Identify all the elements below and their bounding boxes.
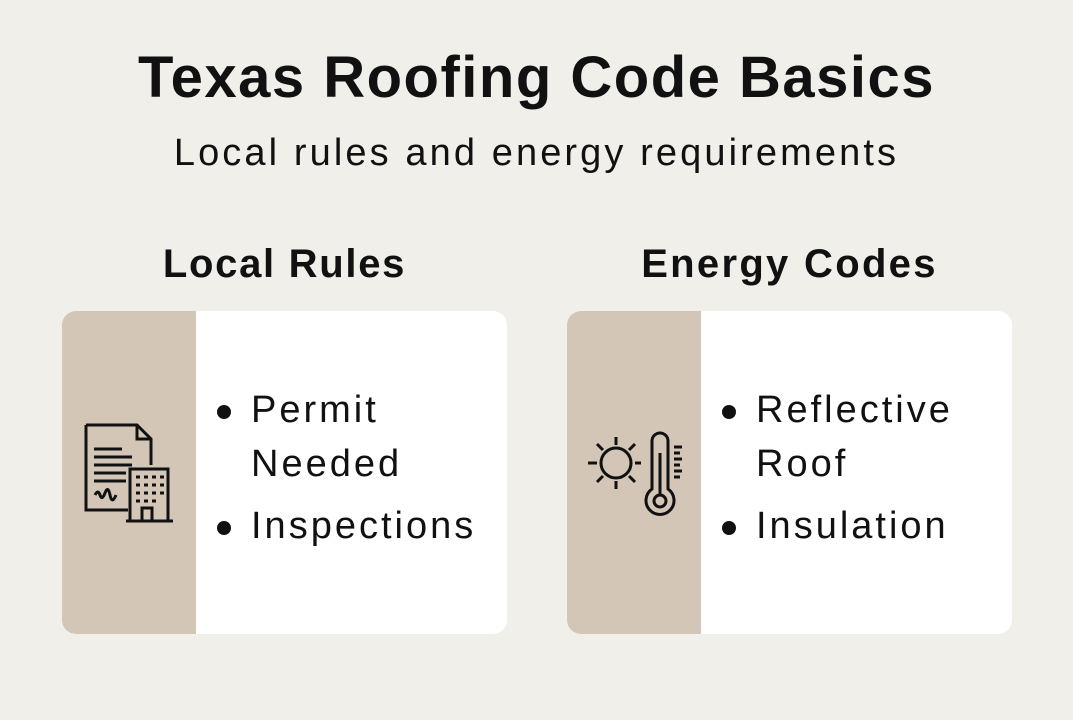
icon: sun and thermometer <box>588 432 682 516</box>
title: Texas Roofing Code Basics <box>138 45 935 110</box>
text: bullets: Needed <box>251 443 402 485</box>
text: bullets: Inspections <box>251 505 476 547</box>
text: bullets: Reflective <box>756 389 953 431</box>
text: bullets: Roof <box>756 443 848 485</box>
heading: energy codes: Energy Codes <box>641 242 938 286</box>
panel: energy codes <box>567 311 1012 634</box>
heading: local rules: Local Rules <box>163 242 406 286</box>
text: bullets: Permit <box>251 389 379 431</box>
text: bullets <box>722 389 953 547</box>
text: bullets <box>217 389 476 547</box>
icon: document and building <box>84 424 173 522</box>
subtitle: Local rules and energy requirements <box>174 132 899 174</box>
panel: local rules <box>62 311 507 634</box>
text: bullets: Insulation <box>756 505 949 547</box>
